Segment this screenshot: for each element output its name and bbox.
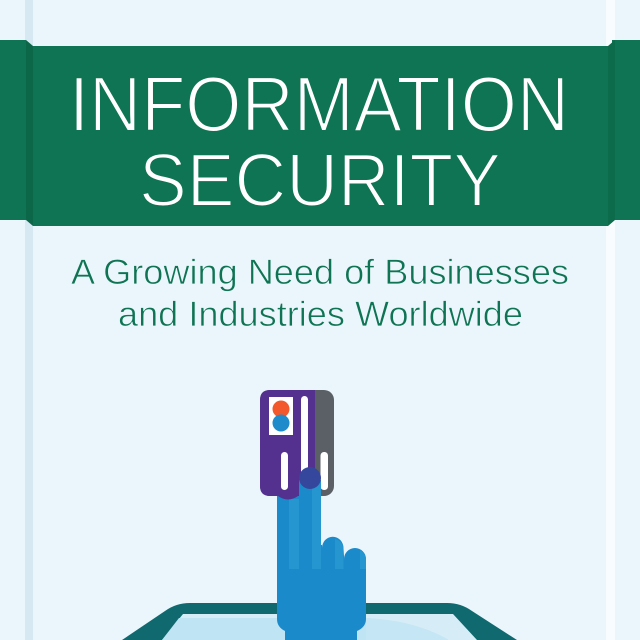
subtitle: and Industries Worldwide bbox=[118, 295, 523, 334]
credit card bbox=[260, 390, 334, 496]
title bbox=[69, 60, 569, 222]
title: INFORMATION bbox=[69, 60, 569, 148]
hand bbox=[277, 467, 366, 640]
subtitle: A Growing Need of Businesses bbox=[71, 253, 569, 292]
title banner bbox=[0, 40, 640, 226]
tablet bbox=[122, 603, 517, 640]
subtitle bbox=[71, 253, 569, 334]
title: SECURITY bbox=[139, 138, 501, 222]
